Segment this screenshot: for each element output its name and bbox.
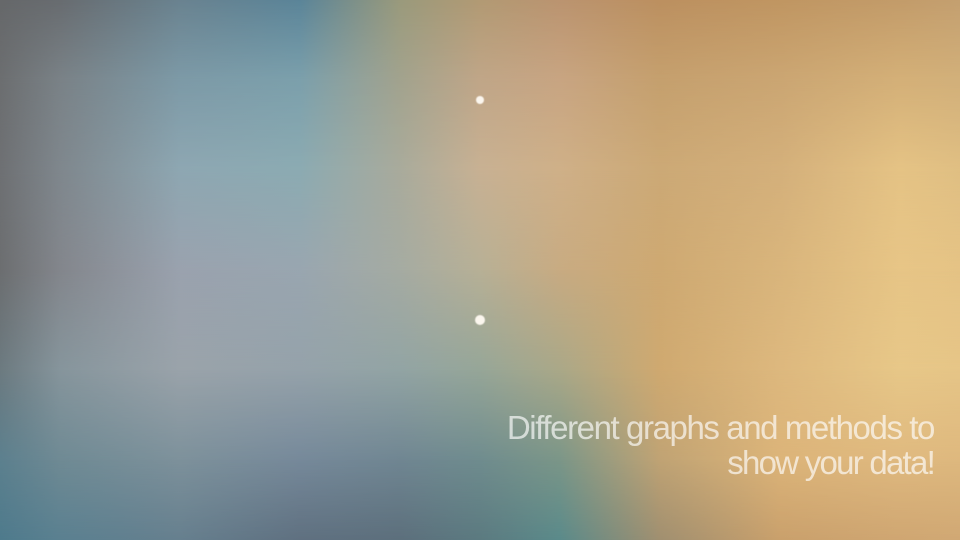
caption text: show your data!	[727, 444, 934, 481]
caption text: Different graphs and methods to	[507, 409, 934, 446]
small white dot	[476, 96, 484, 104]
large white dot	[475, 315, 485, 325]
caption text	[507, 409, 934, 481]
